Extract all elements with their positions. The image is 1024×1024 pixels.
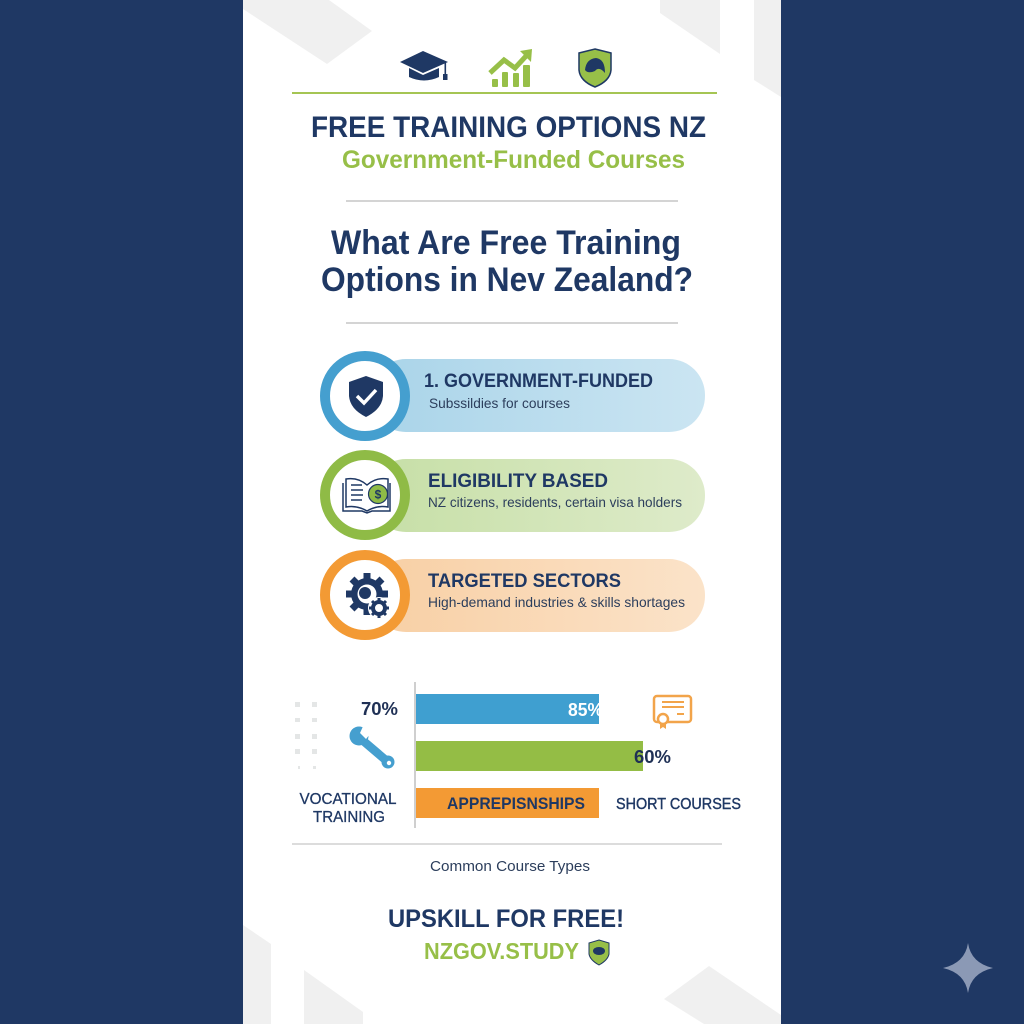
bar: blue 85%: [416, 694, 603, 724]
website link: NZGOV.STUDY: [424, 938, 579, 964]
icon: growth chart arrow: [490, 49, 532, 87]
label: vocational training: [300, 791, 397, 826]
panel: eligibility card: [325, 455, 705, 535]
label: vocational training: VOCATIONAL: [300, 791, 397, 808]
card description: Subssildies for courses: [429, 395, 570, 411]
icon: wrench: [350, 722, 394, 768]
divider: under chart: [292, 843, 722, 845]
icon: gears: [325, 555, 405, 635]
icon: small shield: [589, 940, 609, 965]
card description: High-demand industries & skills shortages: [428, 594, 685, 610]
bar: green 60%: [416, 741, 671, 771]
icon: shield with kiwi: [579, 49, 611, 87]
heading: what are free training options: What Are Free Training: [331, 224, 681, 262]
call to action: UPSKILL FOR FREE!: [388, 905, 624, 933]
divider: header green line: [292, 92, 717, 94]
icon: graduation cap: [400, 51, 448, 80]
card heading: 1. GOVERNMENT-FUNDED: [424, 371, 653, 392]
divider: under heading: [346, 322, 678, 324]
card description: NZ citizens, residents, certain visa holders: [428, 494, 682, 510]
icon: sparkle: [943, 943, 993, 993]
card heading: ELIGIBILITY BASED: [428, 471, 608, 492]
panel: targeted sectors card: [325, 555, 705, 635]
heading: what are free training options: Options in Nev Zealand?: [321, 261, 693, 299]
bar: orange apprenticeships: APPREPISNSHIPS: [447, 794, 585, 813]
card heading: TARGETED SECTORS: [428, 571, 621, 592]
icon: shield check badge: [325, 356, 405, 436]
title: FREE TRAINING OPTIONS NZ: [311, 111, 706, 144]
icon: open book with dollar coin: [325, 455, 405, 535]
icon: certificate: [654, 696, 691, 729]
icon: open book with dollar coin: $: [375, 488, 382, 502]
label: 70%: 70%: [361, 699, 398, 719]
chart: common course types: [414, 682, 671, 828]
bar: orange apprenticeships: [416, 788, 599, 818]
bar: green 60%: 60%: [634, 747, 671, 767]
subtitle: Government-Funded Courses: [342, 146, 685, 174]
label: short courses: SHORT COURSES: [616, 796, 741, 813]
divider: under subtitle: [346, 200, 678, 202]
panel: white poster: [243, 0, 781, 1024]
label: vocational training: TRAINING: [313, 809, 385, 826]
decorative dots: [295, 702, 317, 769]
bar: blue 85%: 85%: [568, 700, 603, 720]
panel: government-funded card: [325, 356, 705, 436]
caption: common course types: Common Course Types: [430, 859, 590, 875]
heading: what are free training options: [321, 224, 693, 299]
